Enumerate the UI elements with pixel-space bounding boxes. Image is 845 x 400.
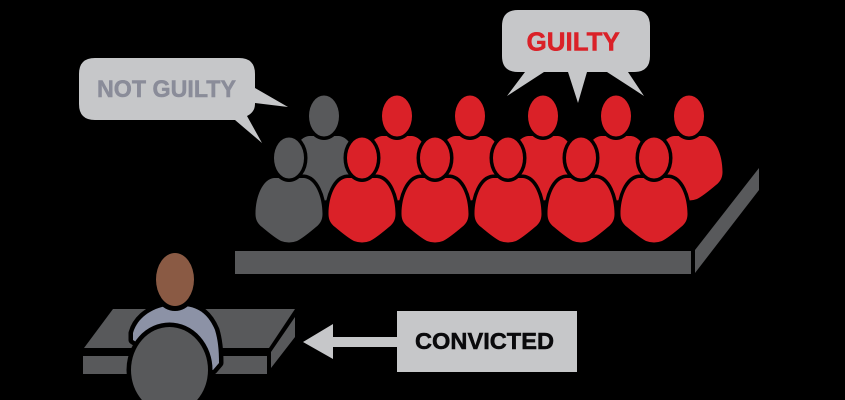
juror front row 5 xyxy=(548,138,614,242)
speech bubble: not guilty: NOT GUILTY xyxy=(97,76,236,103)
speech bubble: guilty xyxy=(502,10,650,103)
juror back row 4 xyxy=(510,96,576,200)
speech bubble: not guilty xyxy=(79,58,288,143)
convicted label: CONVICTED xyxy=(415,328,554,354)
jury members xyxy=(256,96,722,242)
juror back row 2 xyxy=(364,96,430,200)
juror back row 5 xyxy=(582,96,650,200)
arrow xyxy=(303,324,397,359)
convicted label xyxy=(397,311,577,372)
defendant chair back xyxy=(131,327,208,400)
juror front row 1 not guilty xyxy=(256,138,322,242)
defendant body xyxy=(133,306,219,370)
juror back row 3 xyxy=(436,96,504,200)
juror front row 2 xyxy=(328,138,396,242)
juror back row 6 xyxy=(656,96,722,200)
juror back row 1 not guilty xyxy=(290,96,358,200)
juror front row 4 xyxy=(474,138,542,242)
speech bubble: guilty: GUILTY xyxy=(526,26,620,56)
juror front row 3 xyxy=(402,138,468,242)
defense table xyxy=(83,309,295,374)
defendant at table xyxy=(83,253,295,400)
jury platform xyxy=(235,168,759,274)
juror front row 6 xyxy=(620,138,688,242)
defendant head xyxy=(156,253,194,306)
